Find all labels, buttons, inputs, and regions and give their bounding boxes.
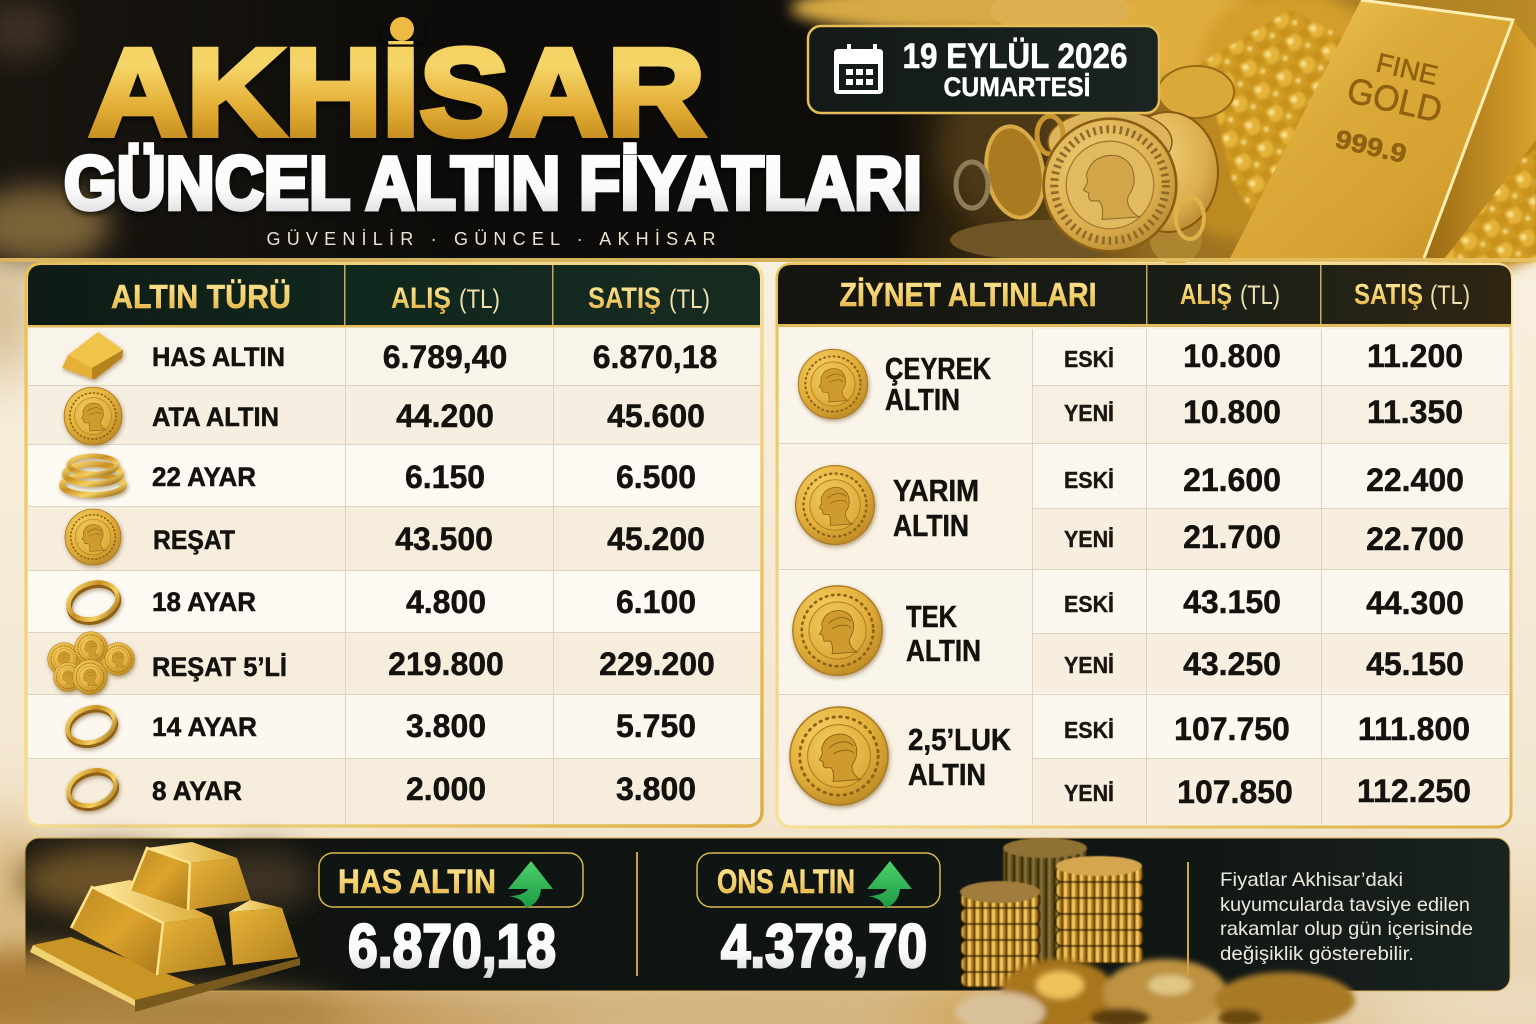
row: 14 ayar: [152, 708, 696, 744]
chain texture: [1190, 10, 1536, 262]
lower coin right: [1150, 216, 1202, 264]
title: güncel altın fiyatları: GÜNCEL ALTIN FİYATLARI: [64, 141, 922, 225]
divider: [1187, 862, 1189, 975]
row: tek eski: 44.300: [1366, 585, 1464, 621]
row: 14 ayar: 14 AYAR: [152, 712, 257, 742]
row: çeyrek yeni: 10.800: [1183, 394, 1281, 430]
row: 8 ayar: 8 AYAR: [152, 776, 242, 806]
row: reşat 5'li: 229.200: [599, 646, 715, 682]
date badge: [808, 26, 1159, 113]
group: çeyrek altın: ALTIN: [885, 382, 960, 417]
row: ata altın: ATA ALTIN: [152, 402, 279, 432]
row: yarım eski: ESKİ: [1064, 467, 1114, 493]
note text: değişiklik gösterebilir.: [1220, 943, 1414, 965]
pill: ons altın: ONS ALTIN: [717, 863, 855, 901]
row: tek eski: 43.150: [1183, 584, 1281, 620]
row: 2,5'luk eski: 107.750: [1174, 711, 1290, 747]
gold pile background: [790, 0, 1536, 270]
row: çeyrek eski: ESKİ: [1064, 346, 1114, 372]
row: 22 ayar: 6.150: [405, 459, 485, 495]
blurred coins foreground: [955, 959, 1355, 1024]
row: ata altın: [152, 398, 705, 434]
row: has altın: 6.789,40: [383, 339, 507, 375]
panel: bottom summary strip: [0, 838, 1510, 1024]
title: Akhisar: AKHİSAR: [89, 24, 705, 162]
coin on edge left: [979, 122, 1051, 222]
date text: 19 EYLÜL 2026: [902, 37, 1128, 76]
coin loops: [956, 162, 988, 208]
icon: ring 14 ayar: [63, 701, 120, 751]
group: çeyrek altın: ÇEYREK: [885, 351, 991, 386]
group: yarım altın: ALTIN: [893, 508, 969, 543]
bar engraving: [1333, 48, 1446, 169]
row: 18 ayar: 6.100: [616, 584, 696, 620]
table header right: (TL): [1240, 280, 1280, 310]
panel: ziynet altınları table: [777, 264, 1511, 827]
main coin: [1044, 119, 1176, 251]
row: çeyrek eski: [1064, 338, 1463, 374]
divider: [636, 852, 638, 976]
row: reşat: 43.500: [395, 521, 493, 557]
note text: kuyumcularda tavsiye edilen: [1220, 894, 1470, 916]
row: 2,5'luk eski: ESKİ: [1064, 717, 1114, 743]
row: tek yeni: [1064, 646, 1464, 682]
row: 8 ayar: 2.000: [406, 771, 486, 807]
coin top right: [1158, 66, 1234, 118]
row: ata altın: 45.600: [607, 398, 705, 434]
note text: [1220, 869, 1473, 965]
row: reşat: 45.200: [607, 521, 705, 557]
table header right: (TL): [1430, 280, 1470, 310]
row: tek yeni: 45.150: [1366, 646, 1464, 682]
icon: five coins: [48, 632, 134, 694]
row: 2,5'luk eski: 111.800: [1358, 711, 1470, 747]
table header left: [28, 265, 760, 328]
row: çeyrek eski: 10.800: [1183, 338, 1281, 374]
note text: Fiyatlar Akhisar’daki: [1220, 869, 1403, 891]
table header right: ALIŞ: [1180, 279, 1232, 311]
icon: resat coin: [65, 509, 121, 565]
pill: has altın: HAS ALTIN: [338, 863, 496, 901]
bar engraving: FINE: [1373, 48, 1441, 91]
row: has altın: [152, 339, 717, 375]
row: 22 ayar: [152, 459, 696, 495]
loop top: [1037, 116, 1063, 154]
value: ons altın: 4.378,70: [721, 912, 927, 980]
table header left: ALTIN TÜRÜ: [111, 278, 291, 315]
row: 18 ayar: 18 AYAR: [152, 587, 256, 617]
right table rows background: [779, 329, 1509, 825]
row: 2,5'luk yeni: [1064, 773, 1471, 810]
row: 18 ayar: 4.800: [406, 584, 486, 620]
icon: coin stacks: [960, 838, 1143, 987]
group: tek altın: [793, 586, 981, 675]
row: 2,5'luk eski: [1064, 711, 1470, 747]
row: has altın: 6.870,18: [593, 339, 717, 375]
pill: ons altın: [697, 853, 940, 908]
row: yarım yeni: 21.700: [1183, 519, 1281, 555]
group: çeyrek altın: [798, 349, 991, 419]
group: 2,5'luk altın: [790, 707, 1012, 805]
group: yarım altın: [796, 466, 979, 544]
group: tek altın: TEK: [906, 599, 958, 634]
bar engraving: 999.9: [1333, 124, 1409, 169]
row: çeyrek yeni: [1064, 394, 1463, 430]
row: yarım yeni: 22.700: [1366, 521, 1464, 557]
row: yarım eski: [1064, 462, 1464, 498]
table header left: (TL): [669, 284, 710, 314]
icon: ring 18 ayar: [64, 576, 123, 628]
row: tek eski: [1064, 584, 1464, 621]
pill: has altın: [319, 853, 583, 908]
row: reşat: [153, 521, 705, 557]
table header left: (TL): [459, 284, 500, 314]
row: 8 ayar: [152, 771, 696, 807]
icon: calendar: [834, 44, 883, 94]
row: yarım yeni: [1064, 519, 1464, 557]
row: 14 ayar: 3.800: [406, 708, 486, 744]
bar engraving: GOLD: [1343, 69, 1446, 131]
icon: gold bar small: [62, 332, 123, 379]
bottom blurred gold backdrop: [0, 240, 1536, 1024]
row: 2,5'luk yeni: 107.850: [1177, 774, 1293, 810]
table header right: ZİYNET ALTINLARI: [840, 276, 1096, 313]
table header right: SATIŞ: [1354, 279, 1423, 311]
row: reşat: REŞAT: [153, 525, 235, 555]
row: has altın: HAS ALTIN: [152, 342, 285, 372]
row: 2,5'luk yeni: YENİ: [1064, 780, 1114, 806]
coin top left: [990, 0, 1130, 34]
note text: rakamlar olup gün içerisinde: [1220, 918, 1473, 940]
row: 18 ayar: [152, 584, 696, 620]
value: has altın: 6.870,18: [348, 912, 556, 980]
row: çeyrek yeni: 11.350: [1367, 394, 1463, 430]
row: ata altın: 44.200: [396, 398, 494, 434]
icon: gold bars pile: [30, 842, 300, 1012]
row: 22 ayar: 22 AYAR: [152, 462, 256, 492]
gold line under header: [0, 258, 1536, 262]
row: çeyrek eski: 11.200: [1367, 338, 1463, 374]
table header left: ALIŞ: [391, 282, 451, 315]
icon: green up arrow: [508, 861, 553, 908]
row: çeyrek yeni: YENİ: [1064, 400, 1114, 426]
left table rows background: [28, 328, 760, 824]
row: tek yeni: YENİ: [1064, 652, 1114, 678]
row: yarım eski: 22.400: [1366, 462, 1464, 498]
row: reşat 5'li: [152, 646, 715, 682]
blurred bokeh left: [0, 0, 1060, 263]
fine gold bar: [1230, 0, 1536, 258]
row: tek eski: ESKİ: [1064, 591, 1114, 617]
group: tek altın: ALTIN: [906, 633, 981, 668]
table header left: SATIŞ: [588, 282, 661, 315]
row: 14 ayar: 5.750: [616, 708, 696, 744]
icon: green up arrow: [867, 861, 912, 908]
table header right: [778, 265, 1511, 327]
day text: CUMARTESİ: [944, 72, 1090, 102]
row: 22 ayar: 6.500: [616, 459, 696, 495]
group: 2,5'luk altın: 2,5’LUK: [908, 722, 1012, 757]
group: 2,5'luk altın: ALTIN: [908, 757, 986, 792]
panel: altın türü table: [26, 264, 762, 826]
icon: stacked rings: [62, 456, 124, 495]
blurred backdrop behind bars: [0, 846, 340, 1024]
icon: ata coin: [64, 387, 122, 445]
lower dim coin: [950, 220, 1130, 260]
row: yarım yeni: YENİ: [1064, 526, 1114, 552]
row: yarım eski: 21.600: [1183, 462, 1281, 498]
row: reşat 5'li: REŞAT 5’Lİ: [152, 652, 287, 682]
coin behind top: [1048, 110, 1172, 174]
row: 8 ayar: 3.800: [616, 771, 696, 807]
icon: ring 8 ayar: [64, 764, 121, 814]
row: tek yeni: 43.250: [1183, 646, 1281, 682]
subtitle: GÜVENİLİR · GÜNCEL · AKHİSAR: [266, 229, 716, 249]
loop right: [1176, 197, 1204, 239]
header background: [0, 0, 1536, 263]
coin behind right: [1118, 112, 1218, 232]
row: reşat 5'li: 219.800: [388, 646, 504, 682]
group: yarım altın: YARIM: [893, 473, 979, 508]
row: 2,5'luk yeni: 112.250: [1357, 773, 1471, 809]
